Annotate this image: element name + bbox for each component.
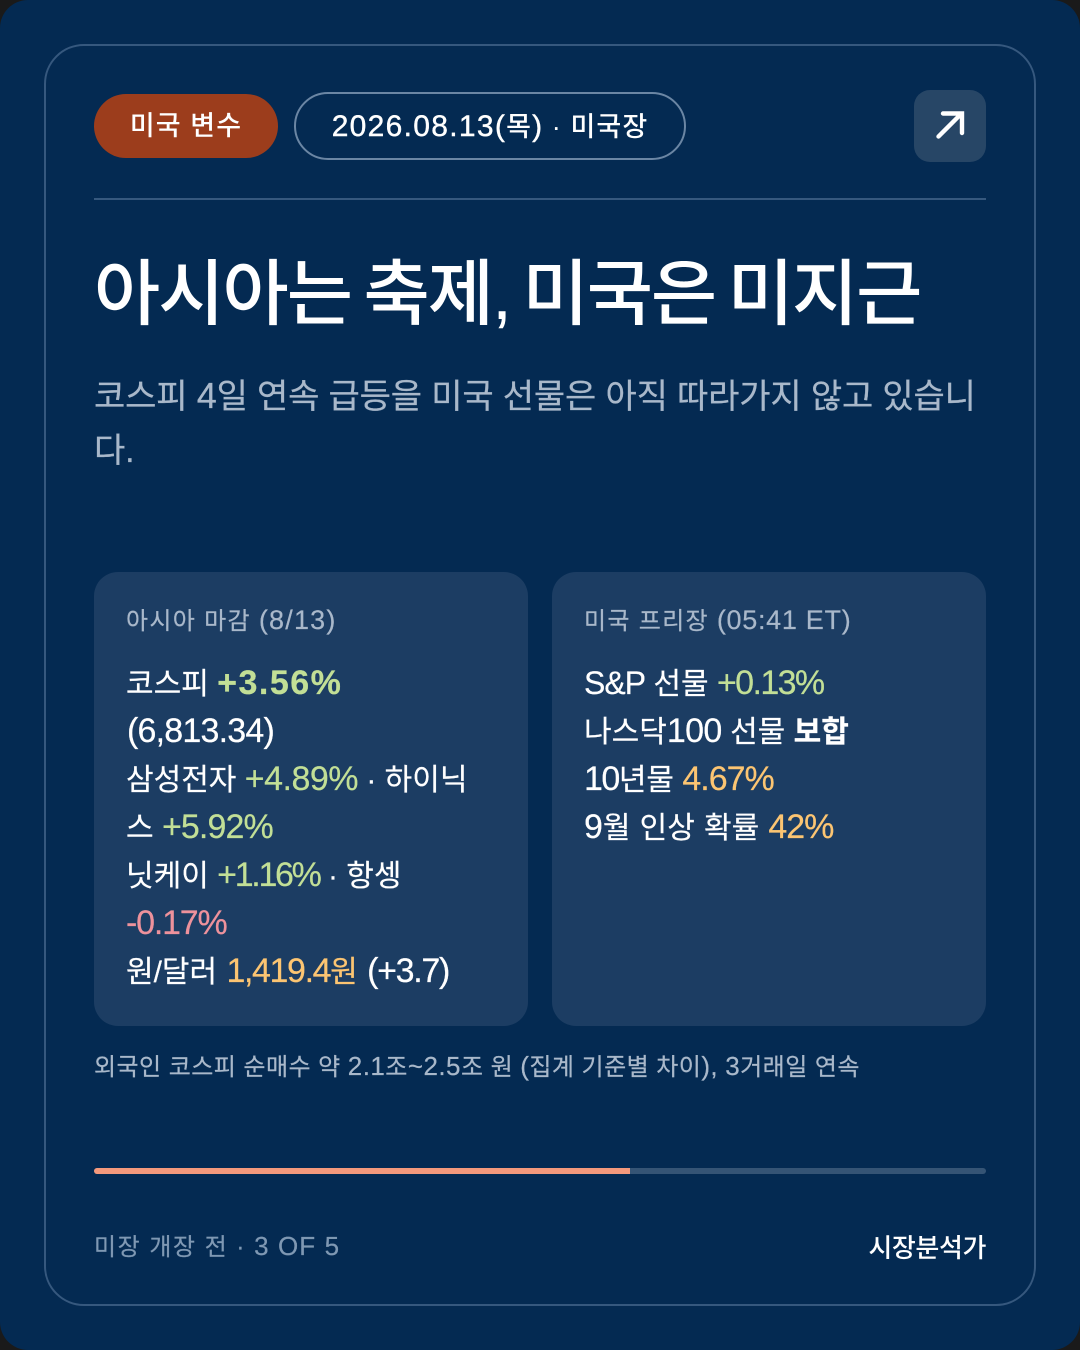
subtitle: 다. <box>94 432 134 470</box>
panel: 미국 프리장 <box>552 572 986 1026</box>
subtitle: 코스피 4일 연속 급등을 미국 선물은 아직 따라가지 않고 있습니 <box>94 375 976 416</box>
tag: 미국 변수: 미국 변수 <box>130 111 242 141</box>
date pill: 2026.08.13(목) · 미국장 <box>332 110 648 143</box>
line: S&P 선물: S&P 선물 +0.13% <box>584 664 824 702</box>
panel label: 미국 프리장 (05:41 ET) <box>584 605 851 635</box>
header divider <box>94 198 986 200</box>
subtitle <box>94 375 976 470</box>
line: 10년물: 10년물 4.67% <box>584 760 774 798</box>
panel label: 아시아 마감 (8/13) <box>126 605 337 635</box>
progress bar <box>94 1168 986 1174</box>
line: 삼성전자: 삼성전자 +4.89% · 하이닉 <box>126 760 467 798</box>
progress fill <box>94 1168 630 1174</box>
icon: arrow button <box>914 90 986 162</box>
footer brand: 시장분석가 <box>868 1233 986 1263</box>
line: 나스닥 선물: 나스닥100 선물 보합 <box>584 712 849 750</box>
panel: 아시아 마감 <box>94 572 528 1026</box>
date pill <box>294 92 686 160</box>
line: 코스피: 코스피 +3.56% <box>126 664 342 702</box>
line: 인상 확률: 9월 인상 확률 42% <box>584 808 833 846</box>
tag: 미국 변수 <box>94 94 278 158</box>
footer left text: 미장 개장 전 · 3 OF 5 <box>94 1231 340 1261</box>
line: 항셍 수치: -0.17% <box>126 904 227 942</box>
line: 닛케이: 닛케이 +1.16% · 항셍 <box>126 856 401 894</box>
line: 하이닉스: 스 +5.92% <box>126 808 273 846</box>
line: 원/달러: 원/달러 1,419.4원 (+3.7) <box>126 952 449 990</box>
footnote: 외국인 코스피 순매수 약 2.1조~2.5조 원 (집계 기준별 차이), 3거래일 연속 <box>94 1051 860 1081</box>
line: 코스피 지수: (6,813.34) <box>127 712 274 750</box>
title: 아시아는 축제, 미국은 미지근 <box>94 255 920 335</box>
